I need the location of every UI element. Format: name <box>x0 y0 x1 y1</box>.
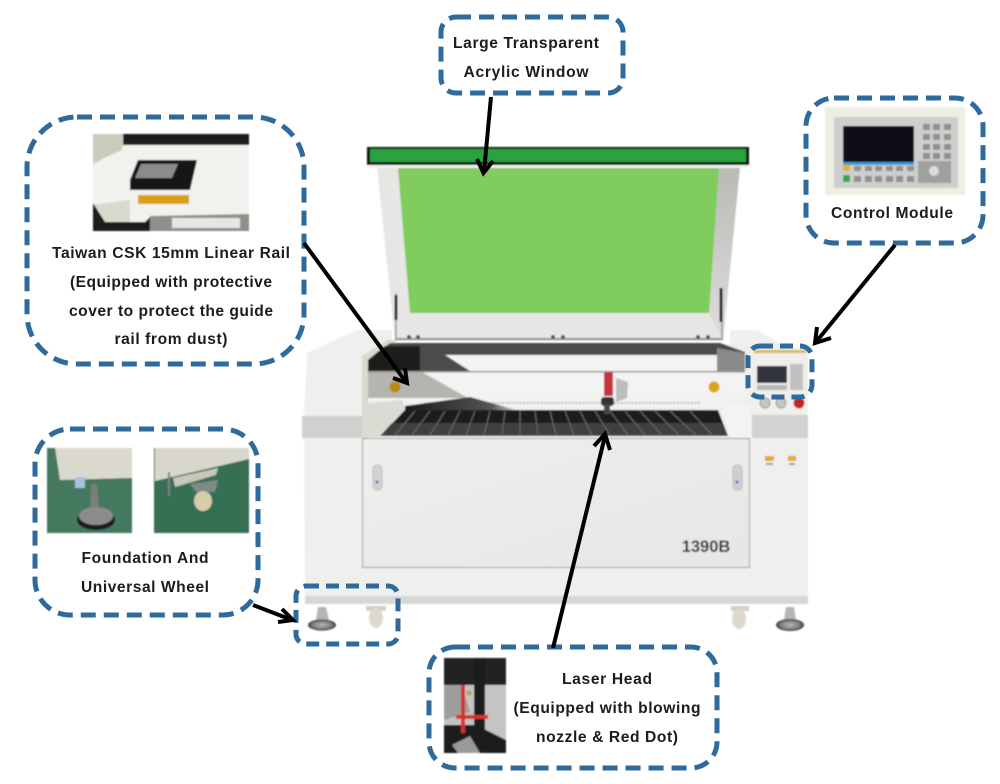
foundation caption: Universal Wheel <box>81 579 209 596</box>
laser head caption: nozzle & Red Dot) <box>536 729 678 746</box>
panel: acrylic window label: Acrylic Window <box>464 64 589 81</box>
highlight: feet <box>296 586 398 644</box>
rail caption <box>52 245 290 348</box>
panel: acrylic window label <box>441 17 623 93</box>
panel: laser head <box>429 647 717 768</box>
rail caption: rail from dust) <box>114 331 228 348</box>
panel: acrylic window label: Large Transparent <box>453 35 599 52</box>
gantry beam <box>368 372 745 400</box>
machine body <box>302 330 808 631</box>
control caption: Control Module <box>831 205 953 222</box>
arrow: acrylic window <box>477 97 493 173</box>
machine lid with acrylic window <box>367 147 749 341</box>
laser head caption: (Equipped with blowing <box>514 700 700 717</box>
door panel <box>362 438 750 568</box>
photo: universal wheel <box>154 448 249 533</box>
arrow: control module <box>815 245 895 343</box>
rocker switches <box>765 456 796 465</box>
laser head caption <box>514 671 700 746</box>
arrow: laser head <box>553 434 610 648</box>
laser head caption: Laser Head <box>562 671 652 688</box>
cutting bed <box>380 410 728 436</box>
rail strip <box>410 400 722 407</box>
panel: control module <box>806 98 983 243</box>
rail caption: cover to protect the guide <box>69 303 273 320</box>
photo: linear rail <box>93 134 249 231</box>
highlight: control panel <box>748 346 812 397</box>
feet and casters <box>308 606 804 631</box>
foundation caption <box>81 550 209 596</box>
photo: laser head <box>444 658 506 753</box>
acrylic window <box>398 168 719 313</box>
photo: foundation <box>47 448 132 533</box>
interior frame <box>362 340 396 438</box>
rail caption: (Equipped with protective <box>70 274 272 291</box>
clear side covers <box>362 400 405 437</box>
arrow: foundation <box>253 605 293 622</box>
foundation caption: Foundation And <box>82 550 208 567</box>
arrow: linear rail <box>304 243 407 383</box>
model number 1390B: 1390B <box>682 538 730 556</box>
laser head on gantry <box>601 372 628 414</box>
photo: control module <box>825 107 965 195</box>
panel: linear rail <box>27 117 304 364</box>
panel: foundation and wheel <box>35 429 258 615</box>
rail caption: Taiwan CSK 15mm Linear Rail <box>52 245 290 262</box>
control panel and knobs <box>752 348 808 408</box>
laser cutter machine <box>302 147 808 631</box>
